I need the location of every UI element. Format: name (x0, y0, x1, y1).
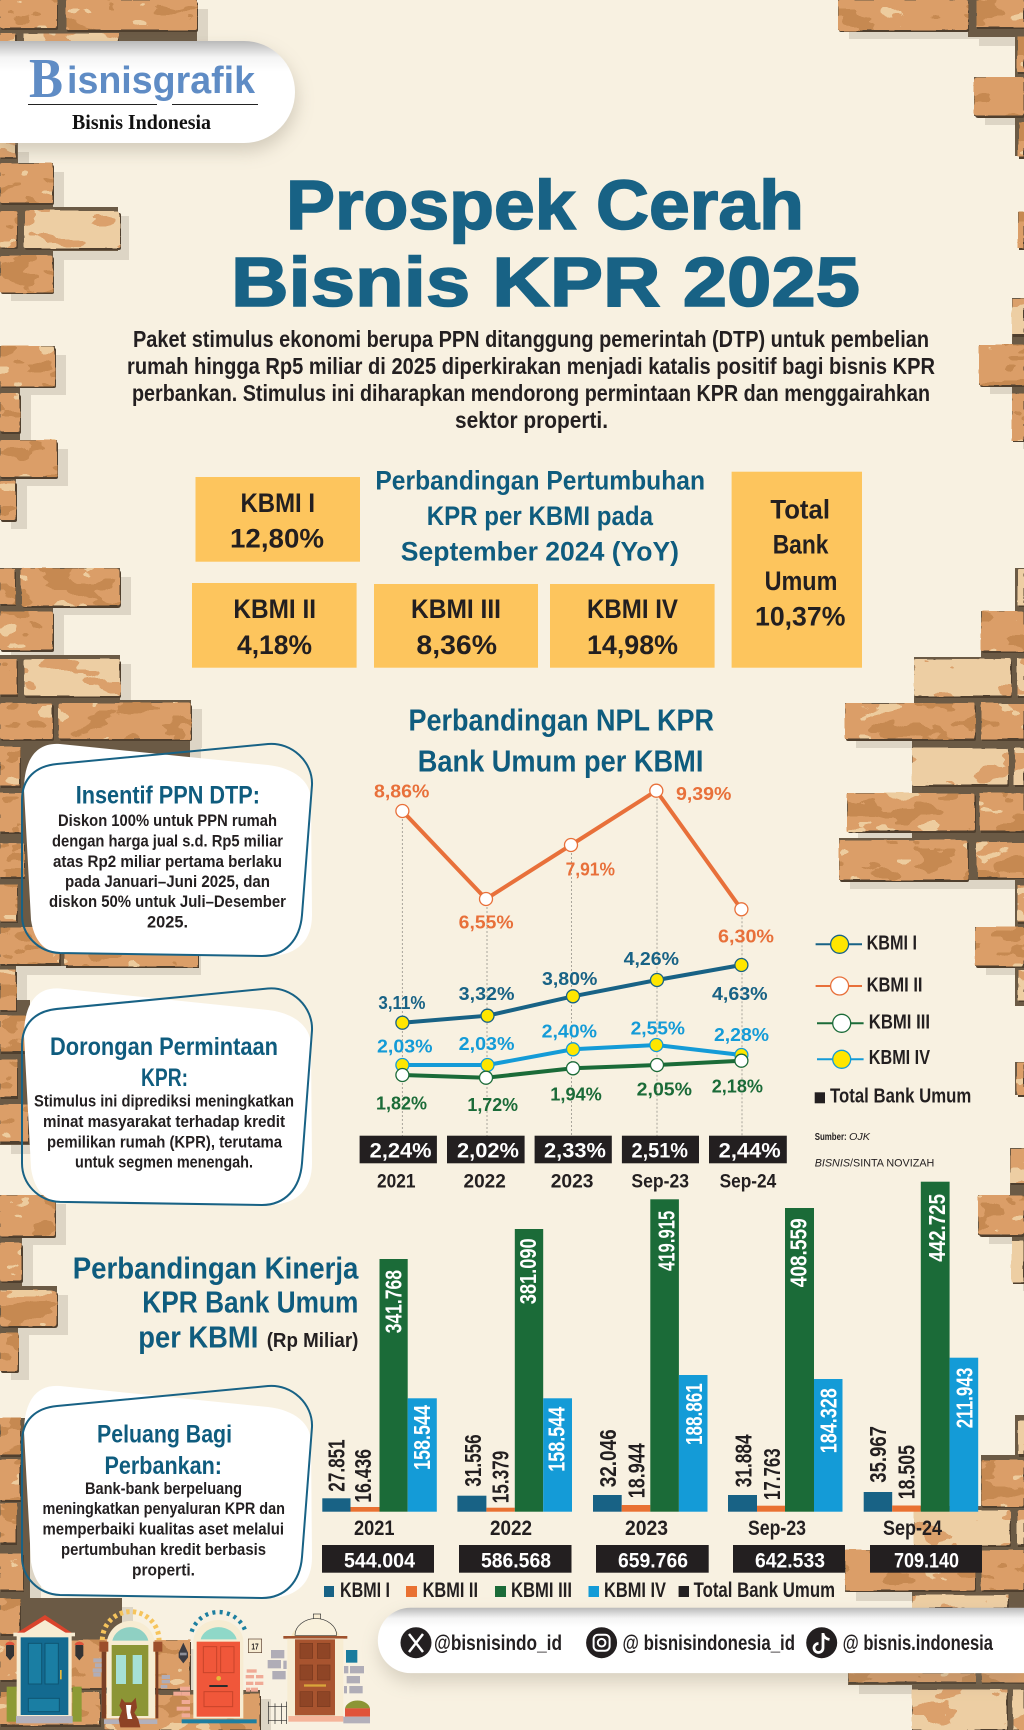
card: KBMI II (192, 583, 357, 668)
line chart: NPL (360, 780, 787, 1192)
bars: Sep-23: 184.328 (816, 1388, 842, 1453)
legend: NPL chart: KBMI III (869, 1010, 930, 1033)
door: red (182, 1612, 257, 1723)
card: KBMI II: KBMI II (233, 594, 316, 624)
bars: Sep-24: 35.967 (865, 1426, 891, 1483)
card: KBMI IV: 14,98% (587, 630, 678, 660)
series: KBMI IV: 2,03% (459, 1033, 514, 1054)
bars: 2022: 381.090 (515, 1238, 541, 1304)
bars: Sep-23 (728, 1208, 842, 1512)
series: KBMI II: 9,39% (676, 783, 731, 804)
panel: Insentif PPN DTP (22, 744, 312, 956)
heading: pertumbuhan: KPR per KBMI pada (427, 501, 654, 531)
bars: 2023: 18.944 (624, 1443, 650, 1498)
bars: 2021: 341.768 (381, 1270, 407, 1333)
bars: 2022: 158.544 (544, 1407, 570, 1472)
panel: Insentif PPN DTP: Insentif PPN DTP: (76, 782, 260, 810)
panel: Insentif PPN DTP: Diskon 100% untuk PPN rumah (58, 812, 277, 830)
decorative wall stones (93, 1650, 364, 1717)
panel: Peluang Bagi Perbankan: Peluang Bagi (97, 1421, 232, 1449)
door: brown (283, 1614, 347, 1722)
door: olive (99, 1612, 162, 1727)
series: KBMI III: 1,82% (376, 1092, 427, 1113)
logo: Bisnisgrafik (0, 41, 296, 151)
panel: Dorongan Permintaan KPR: minat masyarakat terhadap kredit (43, 1112, 285, 1131)
card: KBMI IV (550, 584, 715, 668)
series: KBMI III: 1,94% (550, 1084, 602, 1105)
card: Total Bank Umum: 10,37% (755, 602, 845, 632)
heading: pertumbuhan: Perbandingan Pertumbuhan (375, 465, 705, 495)
title: Prospek Cerah (286, 166, 804, 244)
series: KBMI III: 2,18% (712, 1076, 763, 1097)
bars: Sep-24: 442.725 (924, 1194, 950, 1262)
series: KBMI I: 3,32% (459, 983, 514, 1004)
legend: bar chart: KBMI III (511, 1579, 572, 1602)
total bank umum boxes: 709.140 (894, 1550, 959, 1572)
panel: Dorongan Permintaan KPR: Dorongan Permintaan (50, 1033, 278, 1061)
card: Total Bank Umum: Bank (773, 529, 829, 559)
x axis labels (377, 1170, 776, 1192)
series: KBMI III: 2,05% (637, 1079, 692, 1100)
illustration: row of house doors (5, 1612, 370, 1727)
panel: Dorongan Permintaan KPR: Stimulus ini diprediksi meningkatkan (34, 1092, 294, 1111)
panel: Insentif PPN DTP: 2025. (147, 914, 188, 932)
heading: kinerja KPR: (Rp Miliar) (267, 1330, 358, 1352)
heading: pertumbuhan (375, 465, 705, 567)
bar chart: kinerja KPR (322, 1182, 982, 1573)
x axis labels: Sep-24 (720, 1170, 776, 1192)
bars: 2022: 31.556 (460, 1434, 486, 1487)
bars: Sep-23: 408.559 (786, 1218, 812, 1287)
panel: Insentif PPN DTP: diskon 50% untuk Juli–Desember (49, 893, 287, 911)
heading: kinerja KPR: KPR Bank Umum (142, 1285, 358, 1320)
heading: NPL (408, 703, 714, 779)
panel: Dorongan Permintaan KPR: KPR: (141, 1064, 188, 1092)
panel: Dorongan Permintaan KPR: untuk segmen menengah. (75, 1153, 253, 1172)
x axis labels: 2023 (551, 1170, 594, 1192)
card: KBMI I: 12,80% (230, 523, 324, 553)
panel: Insentif PPN DTP: dengan harga jual s.d. Rp5 miliar (52, 832, 284, 850)
panel: Insentif PPN DTP: atas Rp2 miliar pertama berlaku (53, 853, 282, 871)
series: KBMI II: 8,86% (374, 780, 429, 801)
panel: Dorongan Permintaan KPR (22, 988, 312, 1205)
plant pot (343, 1701, 370, 1723)
heading: NPL: Perbandingan NPL KPR (408, 703, 714, 738)
series: KBMI IV: 2,55% (631, 1017, 685, 1038)
total bank umum boxes: 544.004 (344, 1550, 415, 1572)
card: KBMI II: 4,18% (237, 630, 312, 660)
handle: TikTok (806, 1627, 993, 1658)
series: KBMI III (376, 1054, 763, 1115)
x axis labels: 2023 (625, 1517, 668, 1540)
title (231, 166, 860, 321)
bars: Sep-24: 18.505 (893, 1445, 919, 1499)
card: KBMI III (374, 584, 538, 668)
card: KBMI I (196, 477, 360, 562)
card: KBMI IV: KBMI IV (587, 594, 678, 624)
house number plate: 17 (251, 1642, 259, 1651)
handle: X (400, 1627, 562, 1658)
heading: kinerja KPR (73, 1250, 359, 1354)
series: KBMI II: 6,55% (459, 911, 514, 932)
legend: bar chart (324, 1579, 835, 1602)
panel: Peluang Bagi Perbankan: Perbankan: (104, 1452, 222, 1480)
series: KBMI I: 3,80% (542, 968, 597, 989)
source and credit: Sumber: (815, 1131, 847, 1143)
card: KBMI III: 8,36% (416, 630, 497, 660)
mailbox plate (346, 1650, 357, 1663)
total bank umum boxes (322, 1545, 982, 1573)
panel: Dorongan Permintaan KPR: pemilikan rumah (KPR), terutama (47, 1133, 282, 1152)
intro paragraph (127, 326, 935, 433)
handle: Instagram: @ bisnisindonesia_id (622, 1632, 795, 1655)
series: KBMI II: 7,91% (566, 859, 615, 880)
card: KBMI I: KBMI I (240, 488, 315, 518)
legend: NPL chart: KBMI I (867, 931, 917, 954)
house number plate (248, 1639, 262, 1653)
total bank umum boxes (360, 1136, 787, 1163)
series: KBMI I: 4,26% (624, 948, 679, 969)
bars: 2021: 27.851 (323, 1439, 349, 1492)
series: KBMI IV (377, 1017, 769, 1072)
title: Bisnis KPR 2025 (231, 243, 860, 321)
handle: X: @bisnisindo_id (434, 1632, 562, 1655)
bars: Sep-24: 211.943 (952, 1368, 978, 1428)
series: KBMI I: 3,11% (378, 992, 426, 1013)
legend: NPL chart: KBMI IV (869, 1046, 930, 1069)
legend: bar chart: Total Bank Umum (694, 1579, 835, 1602)
panel: Peluang Bagi Perbankan: pertumbuhan kredit berbasis (61, 1540, 266, 1559)
bars: Sep-23: 17.763 (759, 1448, 785, 1500)
series: KBMI III: 1,72% (467, 1094, 518, 1115)
x axis labels: 2021 (377, 1170, 416, 1192)
series: KBMI IV: 2,03% (377, 1036, 432, 1057)
bars: 2023: 188.861 (681, 1383, 707, 1445)
iron fence (268, 1702, 287, 1724)
x axis labels: 2022 (490, 1517, 532, 1540)
series: KBMI I: 4,63% (712, 983, 768, 1004)
total bank umum boxes: 2,44% (719, 1138, 781, 1162)
heading: kinerja KPR: per KBMI (138, 1319, 258, 1354)
bars: 2023: 32.046 (595, 1429, 621, 1487)
panel: Peluang Bagi Perbankan: memperbaiki kualitas aset melalui (42, 1520, 284, 1539)
handle: Instagram (586, 1627, 795, 1658)
heading: NPL: Bank Umum per KBMI (418, 744, 703, 779)
panel: Peluang Bagi Perbankan: properti. (132, 1561, 195, 1580)
x axis labels: Sep-23 (631, 1170, 689, 1192)
panel: Peluang Bagi Perbankan (22, 1386, 312, 1598)
card: Total Bank Umum: Total (770, 494, 830, 524)
source and credit: BISNIS/SINTA NOVIZAH (815, 1158, 934, 1170)
bars: Sep-24 (864, 1182, 978, 1512)
door: blue (5, 1615, 84, 1723)
logo: Bisnisgrafik: isnisgrafik (67, 60, 256, 102)
bars: 2021: 158.544 (409, 1405, 435, 1470)
card: Total Bank Umum: Umum (765, 566, 837, 596)
card: KBMI III: KBMI III (411, 594, 501, 624)
bars: 2022 (457, 1229, 572, 1512)
x axis labels: Sep-23 (748, 1517, 806, 1540)
source and credit (815, 1131, 934, 1170)
legend: NPL chart (815, 931, 971, 1108)
legend: bar chart: KBMI II (423, 1579, 478, 1602)
series: KBMI IV: 2,28% (714, 1024, 769, 1045)
total bank umum boxes: 642.533 (755, 1550, 825, 1572)
logo: Bisnisgrafik: B (29, 48, 63, 110)
legend: bar chart: KBMI IV (604, 1579, 666, 1602)
total bank umum boxes: 586.568 (481, 1550, 551, 1572)
total bank umum boxes: 2,51% (632, 1138, 688, 1162)
total bank umum boxes: 2,33% (544, 1138, 606, 1162)
legend: NPL chart: Total Bank Umum (830, 1085, 971, 1108)
source and credit: OJK (849, 1131, 871, 1143)
social media bar (378, 1608, 1024, 1682)
series: KBMI I (378, 948, 768, 1029)
heading: pertumbuhan: September 2024 (YoY) (401, 537, 679, 567)
panel: Peluang Bagi Perbankan: Bank-bank berpeluang (85, 1479, 242, 1498)
panel: pertumbuhan KPR per KBMI (192, 465, 862, 668)
x axis labels: 2021 (354, 1517, 395, 1540)
panel: Peluang Bagi Perbankan: meningkatkan penyaluran KPR dan (42, 1499, 285, 1518)
logo: Bisnisgrafik: Bisnis Indonesia (72, 110, 211, 134)
legend: NPL chart: KBMI II (867, 974, 922, 997)
card: Total Bank Umum (732, 472, 862, 668)
series: KBMI IV: 2,40% (542, 1021, 597, 1042)
total bank umum boxes: 2,24% (370, 1138, 432, 1162)
bars: 2021 (322, 1259, 437, 1512)
bars: 2022: 15.379 (488, 1451, 514, 1503)
x axis labels: Sep-24 (883, 1517, 942, 1540)
bars: 2021: 16.436 (350, 1449, 376, 1503)
series: KBMI II (374, 780, 774, 946)
legend: bar chart: KBMI I (340, 1579, 390, 1602)
heading: kinerja KPR: Perbandingan Kinerja (73, 1250, 359, 1285)
panel: Insentif PPN DTP: pada Januari–Juni 2025, dan (65, 873, 270, 891)
x axis labels (354, 1517, 942, 1540)
wall lamp (179, 1643, 188, 1663)
x axis labels: 2022 (464, 1170, 506, 1192)
intro paragraph: sektor properti. (455, 407, 608, 433)
total bank umum boxes: 2,02% (457, 1138, 519, 1162)
bars: 2023 (593, 1199, 708, 1512)
series: KBMI II: 6,30% (718, 925, 774, 946)
bars: Sep-23: 31.884 (730, 1434, 756, 1487)
bars: 2023: 419.915 (654, 1211, 680, 1271)
total bank umum boxes: 659.766 (618, 1550, 688, 1572)
